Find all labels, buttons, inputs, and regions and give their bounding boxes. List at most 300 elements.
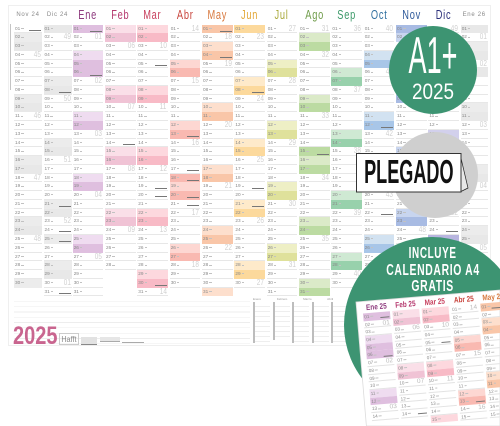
mini calendars 2026: [253, 297, 356, 343]
calendar column: Jun: 23: [235, 218, 241, 223]
calendar column: Sep: 28: [332, 262, 338, 267]
calendar column: Oct: 41: [386, 67, 393, 76]
calendar column: May: May: [207, 8, 227, 22]
calendar column: Ene 26: [461, 12, 488, 294]
calendar column: Dic 24: Dic 24: [47, 12, 68, 18]
calendar column: Oct: 17: [365, 166, 370, 171]
calendar column: Jun: 14: [235, 140, 241, 145]
calendar column: Feb: 12: [106, 122, 111, 127]
calendar column: Ene 26: 11: [462, 113, 467, 118]
card column: Abr 25: 03: [453, 322, 459, 327]
calendar column: Abr: 04: [171, 52, 176, 57]
calendar column: Oct: 14: [365, 140, 370, 145]
calendar column: Jun: [234, 8, 265, 288]
card column: Ene 25: 10: [370, 383, 375, 388]
calendar column: Abr: 17: [171, 166, 176, 171]
calendar column: Feb: [105, 8, 136, 270]
calendar column: Dic: 18: [429, 175, 435, 180]
calendar column: May: 14: [203, 140, 208, 145]
calendar column: Jul: 21: [268, 201, 273, 206]
calendar column: Jun: 22: [235, 210, 241, 215]
calendar column: Ene 26: 30: [462, 280, 467, 285]
calendar column: Jul: 22: [268, 210, 273, 215]
card column: Feb 25: 10: [399, 380, 405, 386]
calendar column: Ene 26: 02: [480, 59, 487, 68]
calendar column: Nov 24: Nov 24: [16, 12, 40, 18]
calendar column: Oct: 28: [365, 262, 370, 267]
calendar column: May: 23: [203, 218, 208, 223]
calendar column: Feb: 01: [106, 26, 111, 31]
calendar column: Ago: 05: [300, 61, 305, 66]
calendar column: Ene 26: 08: [462, 87, 467, 92]
calendar column: Abr: 20: [171, 192, 176, 197]
calendar column: Ene 26: 24: [462, 227, 467, 232]
headline: INCLUYE CALENDARIO A4 GRATIS: GRATIS: [412, 278, 454, 295]
calendar column: Ene: 24: [74, 227, 79, 232]
calendar column: Jul: 15: [268, 148, 273, 153]
folded tag: PLEGADO: PLEGADO: [364, 154, 453, 191]
card column: Mar 25: 01: [423, 309, 428, 314]
calendar column: Oct: 22: [365, 210, 370, 215]
calendar column: May: 05: [203, 61, 208, 66]
calendar column: Nov 24: 07: [15, 78, 20, 83]
calendar column: Jul: 29: [268, 271, 273, 276]
card column: Abr 25: [452, 294, 488, 420]
calendar column: May: 06: [203, 69, 208, 74]
calendar column: Ene 26: 12: [462, 122, 467, 127]
calendar column: Nov: 13: [397, 131, 402, 136]
calendar column: Nov 24: 03: [15, 43, 20, 48]
calendar column: Nov: 08: [397, 87, 402, 92]
calendar column: Nov 24: 11: [15, 113, 20, 118]
calendar column: Sep: 08: [332, 87, 338, 92]
calendar column: Dic 24: 19: [44, 183, 50, 188]
calendar column: Ene 26: 21: [462, 201, 467, 206]
logo: Hafft: Hafft: [61, 334, 77, 344]
calendar column: Ene: 16: [74, 157, 79, 162]
calendar column: Feb: 08: [106, 87, 111, 92]
calendar column: Abr: 14: [171, 140, 176, 145]
calendar column: Oct: 11: [365, 113, 370, 118]
calendar column: Ene 26: 09: [462, 96, 467, 101]
calendar column: Ago: 21: [300, 201, 305, 206]
calendar column: May: 15: [203, 148, 208, 153]
calendar column: Jun: 10: [235, 104, 241, 109]
calendar column: Ene: 03: [74, 43, 79, 48]
calendar column: Abr: 25: [171, 236, 176, 241]
calendar column: Dic: 04: [429, 52, 435, 57]
calendar column: Dic 24: 20: [44, 192, 50, 197]
calendar column: Nov: 16: [397, 157, 402, 162]
calendar column: Ene 26: Ene 26: [463, 12, 486, 18]
card column: Mar 25: 15: [432, 416, 437, 422]
calendar column: Oct: 26: [365, 245, 370, 250]
calendar column: Dic 24: 09: [44, 96, 50, 101]
calendar column: Nov 24: 16: [15, 157, 20, 162]
calendar column: Jul: 08: [268, 87, 273, 92]
calendar column: Abr: 06: [171, 69, 176, 74]
calendar column: Jul: 09: [268, 96, 273, 101]
calendar column: Ago: 17: [300, 166, 305, 171]
calendar column: Abr: 08: [171, 87, 176, 92]
card column: Ene 25: 01: [364, 314, 370, 319]
calendar column: Nov: 15: [397, 148, 402, 153]
calendar column: Dic: 08: [429, 87, 435, 92]
calendar column: Nov 24: 23: [15, 218, 20, 223]
calendar column: Sep: 37: [354, 85, 361, 94]
calendar column: Ene 26: 26: [462, 245, 467, 250]
calendar column: Sep: 23: [332, 218, 338, 223]
calendar column: May: 17: [203, 166, 208, 171]
calendar column: Dic 24: 04: [44, 52, 50, 57]
calendar column: May: 19: [224, 59, 232, 68]
calendar column: Oct: 12: [365, 122, 370, 127]
calendar column: Jul: 31: [289, 260, 296, 269]
calendar column: Dic: 19: [429, 183, 435, 188]
calendar column: Ene 26: 23: [462, 218, 467, 223]
calendar column: Ene 26: 20: [462, 192, 467, 197]
calendar column: Nov: 02: [397, 34, 402, 39]
calendar column: Oct: 13: [365, 131, 370, 136]
card column: Abr 25: 02: [453, 314, 458, 320]
calendar column: Dic 24: 01: [44, 26, 50, 31]
calendar column: Mar: 31: [138, 289, 144, 294]
calendar column: May: 28: [203, 262, 208, 267]
calendar column: Dic 24: 51: [63, 155, 70, 164]
left edge marker: [10, 24, 11, 90]
calendar column: Dic: 06: [429, 69, 435, 74]
calendar column: Abr: 15: [171, 148, 176, 153]
calendar column: Nov: 03: [397, 43, 402, 48]
calendar column: Feb: 25: [106, 236, 111, 241]
calendar column: Ene 26: 15: [462, 148, 467, 153]
calendar column: May: 21: [224, 181, 232, 190]
calendar column: Ago: 06: [300, 69, 305, 74]
card column: May 25: [480, 292, 500, 418]
calendar column: Ene: 25: [74, 236, 79, 241]
calendar column: Dic 24: 13: [44, 131, 50, 136]
calendar column: Sep: 26: [332, 245, 338, 250]
calendar column: Mar: 01: [138, 26, 144, 31]
card column: Feb 25: 04: [395, 334, 401, 340]
calendar column: May: 07: [203, 78, 208, 83]
calendar column: Sep: 27: [332, 254, 338, 258]
calendar column: Mar: 27: [138, 254, 144, 258]
calendar column: Sep: Sep: [337, 8, 356, 22]
calendar column: Jun: 13: [235, 131, 241, 136]
calendar column: Ene 26: 19: [462, 183, 467, 188]
card column: Feb 25: 13: [401, 403, 407, 409]
calendar column: Ene: 23: [74, 218, 79, 223]
calendar column: May: 18: [203, 175, 208, 180]
calendar column: Sep: 04: [332, 52, 338, 57]
calendar column: Jun: 05: [235, 61, 241, 66]
calendar column: Ene 26: 03: [462, 43, 467, 48]
calendar column: Feb: 23: [106, 218, 111, 223]
calendar column: May: 18: [224, 32, 232, 41]
calendar column: Oct: 29: [365, 271, 370, 276]
calendar column: Ene 26: 02: [462, 34, 467, 39]
calendar column: Feb: 06: [106, 69, 111, 74]
calendar column: Dic: 27: [429, 254, 435, 258]
card column: Feb 25: 08: [398, 365, 403, 371]
calendar column: Dic 24: 29: [44, 271, 50, 276]
calendar column: Sep: 06: [332, 69, 338, 74]
calendar column: Nov: 04: [397, 52, 402, 57]
calendar column: Nov 24: 04: [15, 52, 20, 57]
card column: Mar 25: 10: [428, 378, 434, 383]
year 2025: 2025: [13, 322, 58, 350]
calendar column: Feb: Feb: [111, 8, 129, 22]
calendar column: Jul: 26: [268, 245, 273, 250]
calendar column: Mar: 17: [138, 166, 144, 171]
calendar column: Abr: 27: [171, 254, 176, 258]
calendar column: Ene 26: 07: [462, 78, 467, 83]
calendar column: Nov 24: 08: [15, 87, 20, 92]
card column: Abr 25: 15: [473, 350, 481, 357]
calendar column: Oct: 06: [365, 69, 370, 74]
calendar column: Ene: 19: [74, 183, 79, 188]
calendar column: Feb: 07: [127, 102, 134, 111]
calendar column: Sep: 03: [332, 43, 338, 48]
calendar column: Oct: 10: [365, 104, 370, 109]
mini calendars 2026: Enero Febrero Marzo Abril Mayo: [253, 297, 356, 301]
calendar column: Abr: Abr: [177, 8, 193, 22]
calendar column: Nov: 25: [397, 236, 402, 241]
calendar column: Ene: 17: [74, 166, 79, 171]
calendar column: Ago: Ago: [305, 8, 324, 22]
calendar column: Ago: 33: [321, 111, 328, 120]
calendar column: Feb: 22: [106, 210, 111, 215]
calendar column: Jun: 06: [235, 69, 241, 74]
calendar column: Mar: 09: [138, 96, 144, 101]
calendar column: Nov: 24: [397, 227, 402, 232]
calendar column: Jul: 27: [289, 24, 296, 33]
calendar column: Ene 26: 28: [462, 262, 467, 267]
card column: Abr 25: 01: [452, 307, 457, 312]
calendar column: Ene: 18: [74, 175, 79, 180]
calendar column: Feb: 02: [106, 34, 111, 39]
calendar column: Ene 26: 22: [462, 210, 467, 215]
card column: Feb 25: [392, 299, 428, 418]
calendar column: Jun: 26: [257, 216, 264, 225]
calendar column: Ene: 22: [74, 210, 79, 215]
calendar column: Dic 24: 18: [44, 175, 50, 180]
calendar column: Dic: 22: [429, 210, 435, 215]
card column: Feb 25: 07: [417, 378, 425, 385]
calendar column: Dic: 12: [429, 122, 435, 127]
calendar column: Feb: 10: [106, 104, 111, 109]
calendar column: May: 20: [224, 120, 232, 129]
calendar column: Ene: 29: [74, 271, 79, 276]
calendar column: Sep: 02: [332, 34, 338, 39]
calendar column: Jul: 25: [268, 236, 273, 241]
calendar column: Dic: 24: [429, 227, 435, 232]
badge label: 2025: 2025: [412, 79, 454, 104]
calendar column: Feb: 03: [106, 43, 111, 48]
calendar column: May: 22: [203, 210, 208, 215]
card column: Abr 25: 10: [458, 376, 463, 381]
calendar column: Dic 24: 02: [44, 34, 50, 39]
calendar column: Jun: 04: [235, 52, 241, 57]
calendar column: Dic: 51: [451, 146, 458, 155]
calendar column: Nov: 20: [397, 192, 402, 197]
calendar column: Mar: 12: [138, 122, 144, 127]
calendar column: Jul: 27: [268, 254, 273, 258]
calendar column: Ago: 11: [300, 113, 305, 118]
calendar column: May: 10: [203, 104, 208, 109]
calendar column: Ene: 30: [74, 280, 79, 285]
card column: Ene 25: [363, 301, 399, 421]
calendar column: Dic 24: 07: [44, 78, 50, 83]
calendar column: Nov 24: 20: [15, 192, 20, 197]
calendar column: Nov: 14: [397, 140, 402, 145]
calendar column: Nov: [396, 8, 427, 285]
card column: Mar 25: 06: [426, 347, 431, 353]
calendar column: Abr: 24: [171, 227, 176, 232]
calendar sheet background: [8, 5, 491, 346]
calendar column: Mar: 11: [138, 113, 143, 118]
calendar column: Feb: 09: [106, 96, 111, 101]
calendar column: Jun: 30: [235, 280, 241, 285]
calendar column: Mar: 29: [138, 271, 144, 276]
calendar column: Sep: 21: [332, 201, 338, 206]
calendar column: Ago: 22: [300, 210, 305, 215]
calendar column: Jul: 24: [268, 227, 273, 232]
calendar column: Ene: 10: [74, 104, 79, 109]
calendar column: Jul: 30: [268, 280, 273, 285]
calendar column: Jun: 11: [235, 113, 240, 118]
calendar column: May: 30: [203, 280, 208, 285]
calendar column: Ago: 15: [300, 148, 305, 153]
calendar column: Oct: 08: [365, 87, 370, 92]
calendar column: Jun: 15: [235, 148, 241, 153]
calendar column: Jul: 04: [268, 52, 273, 57]
calendar column: Jul: 28: [268, 262, 273, 267]
card column: May 25: 05: [484, 335, 489, 340]
card column: Abr 25: 05: [455, 337, 460, 343]
calendar column: Oct: 01: [365, 26, 370, 31]
calendar column: Nov 24: 28: [15, 262, 20, 267]
calendar column: May: 24: [203, 227, 208, 232]
calendar column: Jul: 06: [268, 69, 273, 74]
calendar column: May: 27: [203, 254, 208, 258]
card column: Ene 25: 12: [371, 398, 377, 404]
calendar column: Oct: 44: [386, 252, 393, 260]
calendar column: Ago: 35: [321, 234, 328, 243]
calendar column: Jun: 12: [235, 122, 241, 127]
calendar column: Dic: 09: [429, 96, 435, 101]
calendar column: Oct: 15: [365, 148, 370, 153]
calendar column: Mar: 03: [138, 43, 144, 48]
calendar column: Dic: 15: [429, 148, 435, 153]
calendar column: Jul: 17: [268, 166, 273, 171]
calendar column: Nov: 06: [397, 69, 402, 74]
calendar column: Feb: 17: [106, 166, 111, 171]
card column: May 25: 02: [482, 312, 487, 317]
calendar column: Mar: 04: [138, 52, 144, 57]
calendar column: Ene: 02: [95, 76, 102, 85]
calendar column: Feb: 04: [106, 52, 111, 57]
calendar column: Abr: 15: [192, 76, 199, 85]
card column: Ene 25: Ene 25: [365, 301, 387, 312]
calendar column: Nov: 22: [397, 210, 402, 215]
calendar column: Ago: 07: [300, 78, 305, 83]
calendar column: Ene: 31: [74, 289, 79, 294]
calendar column: Nov: 18: [397, 175, 402, 180]
calendar column: Ene: 11: [74, 113, 79, 118]
calendar column: Sep: 16: [332, 157, 338, 162]
card column: Feb 25: 14: [402, 411, 407, 416]
calendar column: Nov 24: 15: [15, 148, 20, 153]
calendar column: Mar: 02: [138, 34, 144, 39]
calendar column: Oct: 42: [386, 129, 393, 138]
calendar column: May: 29: [203, 271, 208, 276]
calendar column: Jul: 28: [289, 76, 296, 85]
calendar column: Dic: 29: [429, 271, 435, 276]
calendar column: Dic: 17: [429, 166, 435, 171]
calendar column: Ene: 09: [74, 96, 79, 101]
calendar column: Ago: 20: [300, 192, 305, 197]
calendar column: Dic 24: 52: [63, 216, 70, 225]
calendar column: Jul: 07: [268, 78, 273, 83]
card column: Ene 25: 11: [370, 391, 376, 396]
card column: Feb 25: 03: [395, 327, 400, 332]
calendar column: Jul: 16: [268, 157, 273, 162]
calendar column: Nov: 09: [397, 96, 402, 101]
calendar column: Feb: 18: [106, 175, 111, 180]
calendar column: Oct: 18: [365, 175, 370, 180]
calendar column: Oct: 09: [365, 96, 370, 101]
calendar column: Oct: Oct: [371, 8, 387, 22]
calendar column: Sep: 22: [332, 210, 338, 215]
calendar column: Nov 24: 10: [15, 104, 20, 109]
calendar column: Ago: 19: [300, 183, 305, 188]
calendar column: Ago: 23: [300, 218, 305, 223]
calendar column: Sep: 18: [332, 175, 338, 180]
calendar column: Mar: 10: [138, 104, 144, 109]
card column: Ene 25: 08: [369, 368, 374, 373]
calendar column: Feb: 16: [106, 157, 111, 162]
calendar column: Sep: 25: [332, 236, 338, 241]
calendar column: Nov 24: 09: [15, 96, 20, 101]
calendar column: Dic: 21: [429, 201, 435, 206]
calendar column: Nov: 05: [397, 61, 402, 66]
calendar column: Jun: 28: [235, 262, 241, 267]
calendar column: Ene 26: 16: [462, 157, 467, 162]
calendar column: May: 25: [203, 236, 208, 241]
calendar column: Oct: [364, 8, 394, 294]
calendar column: May: 16: [203, 157, 208, 162]
card column: Abr 25: 13: [460, 398, 465, 404]
calendar column: Ago: 29: [300, 271, 305, 276]
calendar column: Jun: 01: [235, 26, 241, 31]
calendar column: Ago: 12: [300, 122, 305, 127]
calendar column: Mar: 14: [160, 287, 167, 296]
card column: Mar 25: 10: [442, 322, 449, 329]
calendar column: Ene 26: 01: [480, 32, 487, 41]
calendar column: Jun: 09: [235, 96, 241, 101]
calendar column: Mar: 30: [138, 280, 144, 285]
card column: Mar 25: 03: [424, 324, 429, 330]
calendar column: Sep: 39: [354, 208, 361, 217]
calendar column: Jun: 17: [235, 166, 241, 171]
calendar column: Jun: 26: [235, 245, 241, 250]
calendar column: Nov: Nov: [402, 8, 421, 22]
calendar column: Mar: 13: [138, 131, 144, 136]
calendar column: May: [202, 8, 233, 296]
calendar column: Nov 24: 02: [15, 34, 20, 39]
